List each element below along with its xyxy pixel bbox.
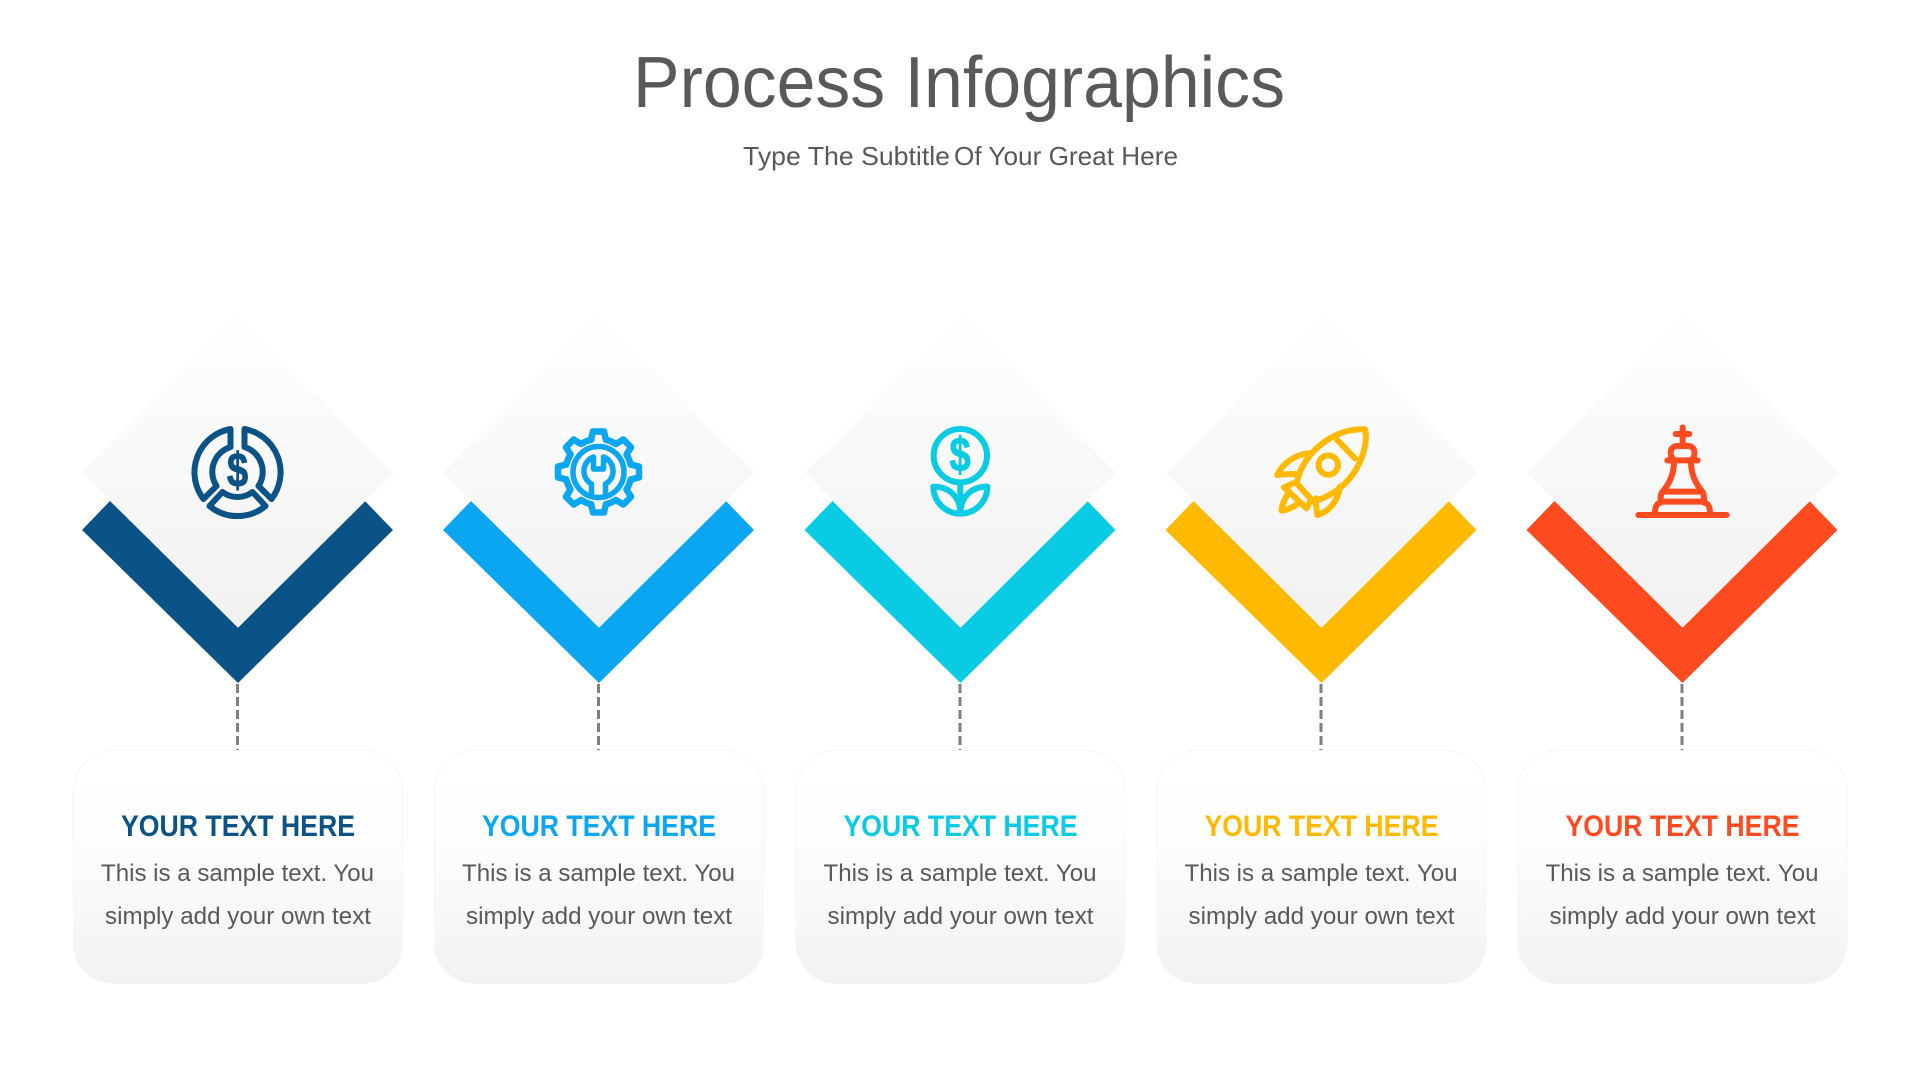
text card	[1157, 750, 1486, 984]
card body: simply add your own text	[1188, 903, 1455, 930]
card heading: YOUR TEXT HERE	[1566, 810, 1800, 843]
card body: simply add your own text	[828, 903, 1094, 930]
icon: pie chart with dollar	[194, 429, 281, 516]
dashed connector	[236, 684, 239, 750]
chevron	[1526, 501, 1838, 683]
card heading: YOUR TEXT HERE	[844, 810, 1078, 843]
diamond	[444, 318, 754, 627]
card body: simply add your own text	[466, 903, 732, 930]
title: Process Infographics	[633, 43, 1285, 123]
dashed connector	[958, 684, 962, 750]
text card	[796, 750, 1125, 984]
chevron	[804, 501, 1116, 683]
card body: This is a sample text. You	[1546, 860, 1818, 887]
icon: pie chart with dollar: $	[227, 444, 248, 498]
card body: This is a sample text. You	[101, 860, 374, 887]
dashed connector	[1680, 684, 1684, 750]
diamond	[1527, 318, 1838, 627]
diamond	[82, 318, 394, 627]
subtitle: Type The Subtitle	[743, 141, 950, 171]
chevron	[1166, 501, 1476, 683]
card body: This is a sample text. You	[824, 860, 1096, 887]
dashed connector	[597, 684, 600, 750]
step 4	[1157, 318, 1486, 984]
icon: chess king	[1638, 427, 1727, 515]
icon: plant with dollar coin	[933, 429, 987, 514]
step 2	[434, 318, 764, 984]
step 1	[74, 318, 402, 984]
text card	[74, 750, 402, 984]
card heading: YOUR TEXT HERE	[121, 810, 355, 843]
step 3	[796, 318, 1125, 984]
step 5	[1518, 318, 1847, 984]
text card	[1518, 750, 1847, 984]
card body: simply add your own text	[105, 903, 371, 930]
card body: simply add your own text	[1550, 903, 1816, 930]
card body: This is a sample text. You	[462, 860, 735, 887]
card heading: YOUR TEXT HERE	[482, 810, 716, 843]
card body: This is a sample text. You	[1184, 860, 1458, 887]
dashed connector	[1320, 684, 1322, 750]
card heading: YOUR TEXT HERE	[1204, 810, 1438, 843]
text card	[434, 750, 764, 984]
chevron	[82, 501, 393, 683]
diamond	[1166, 318, 1477, 627]
diamond	[805, 318, 1116, 627]
subtitle: Of Your Great Here	[954, 141, 1178, 171]
chevron	[443, 501, 754, 683]
icon: plant with dollar coin: $	[949, 429, 971, 482]
icon: rocket	[1277, 429, 1366, 515]
icon: gear with wrench	[557, 431, 640, 513]
